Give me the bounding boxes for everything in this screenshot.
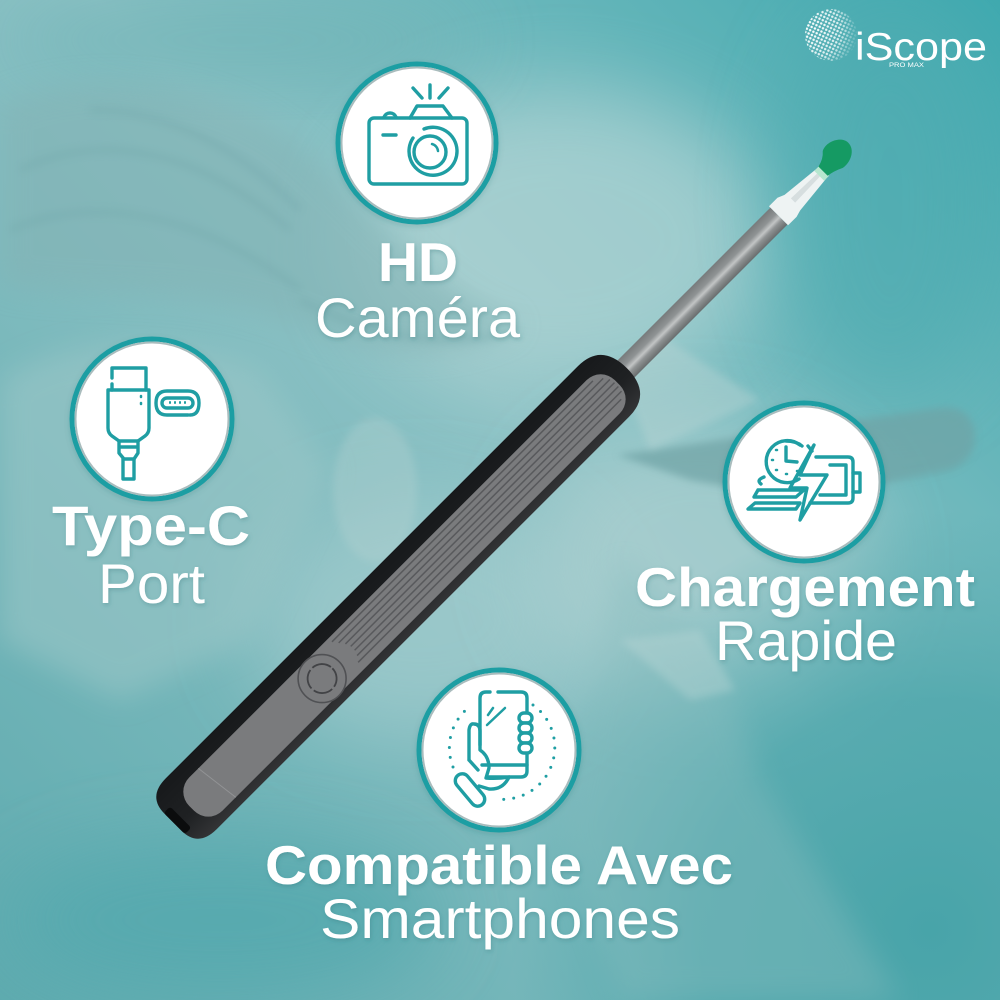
heading: HD Caméra <box>315 231 521 349</box>
heading: Compatible Avec Smartphones <box>265 834 733 950</box>
logo: iScope Pro Max: PRO MAX <box>889 63 924 69</box>
power button <box>288 645 356 713</box>
badge: HD camera icon <box>338 64 496 222</box>
otoscope shaft and tip <box>610 133 859 383</box>
heading: Type-C Port: Type-C <box>52 494 250 557</box>
heading: Type-C Port <box>52 494 250 615</box>
heading: Chargement Rapide: Chargement <box>635 556 975 618</box>
heading: Compatible Avec Smartphones: Smartphones <box>320 887 680 950</box>
otoscope handle <box>147 343 652 848</box>
heading: Chargement Rapide <box>635 556 975 672</box>
heading: Type-C Port: Port <box>98 552 205 615</box>
heading: HD Caméra: Caméra <box>315 286 521 349</box>
heading: Chargement Rapide: Rapide <box>715 609 897 672</box>
logo: iScope Pro Max <box>805 9 987 69</box>
badge: smartphone in hand icon <box>419 670 579 830</box>
badge: USB Type-C icon <box>72 339 232 499</box>
product: ear otoscope <box>147 133 859 848</box>
handle grooves <box>198 367 633 802</box>
logo: iScope Pro Max: iScope <box>855 26 987 69</box>
heading: Compatible Avec Smartphones: Compatible Avec <box>265 834 733 896</box>
badge: fast charging icon <box>725 403 883 561</box>
heading: HD Caméra: HD <box>378 231 458 293</box>
